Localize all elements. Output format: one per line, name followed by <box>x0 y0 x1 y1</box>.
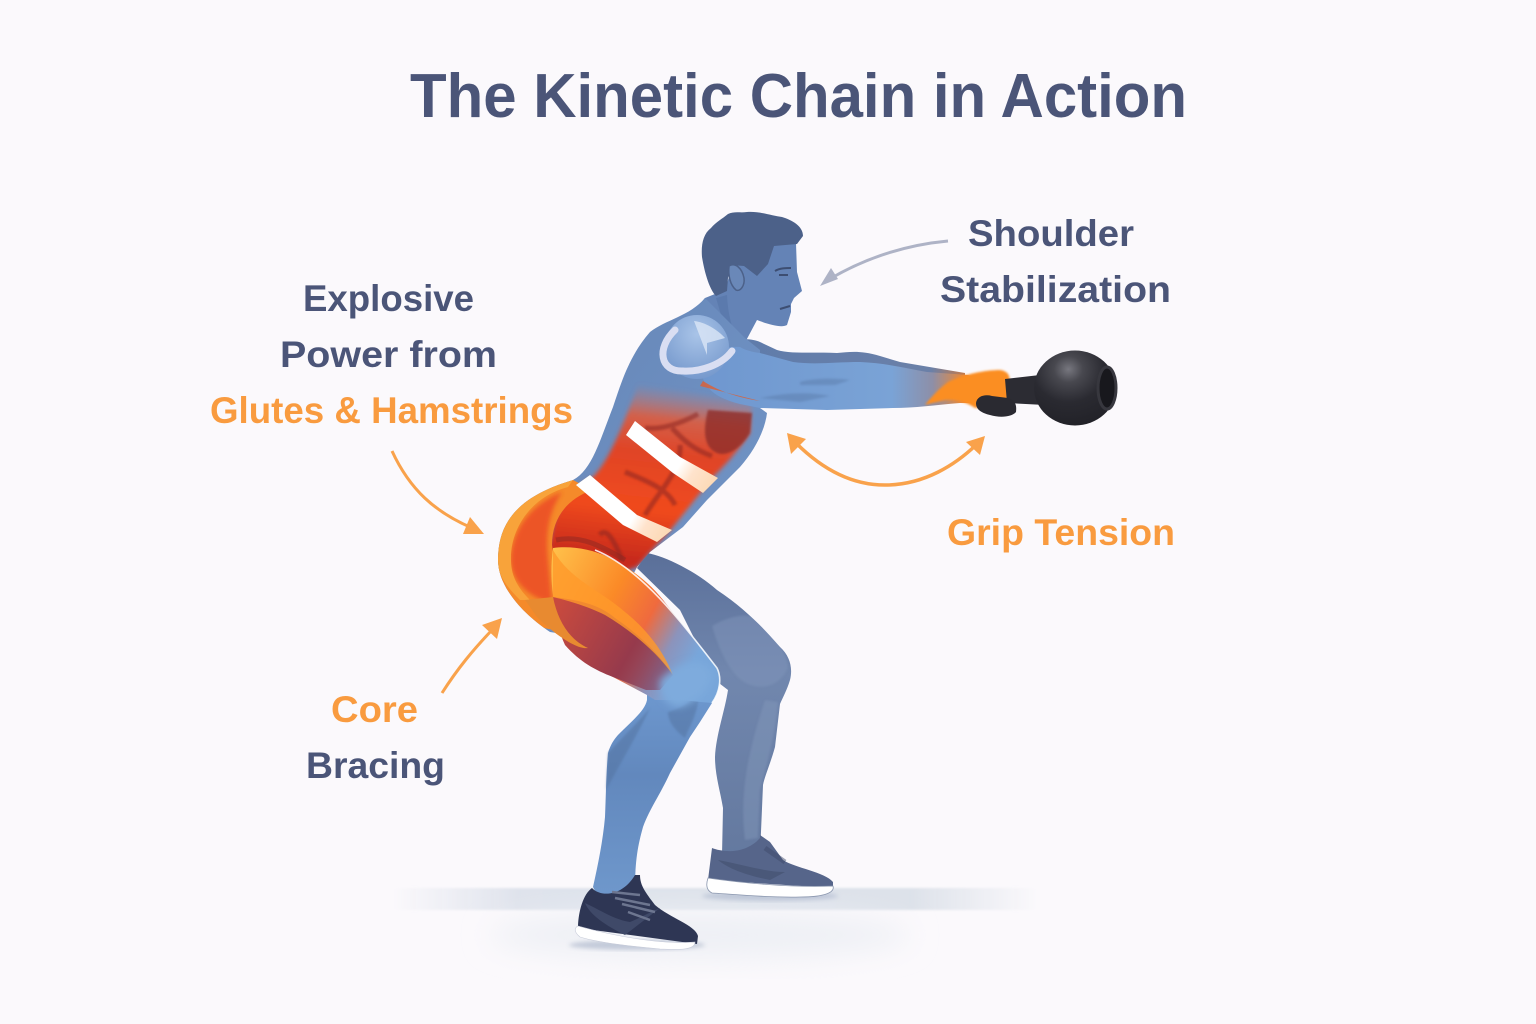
hair <box>702 212 803 296</box>
front arm <box>702 347 990 410</box>
front shoe <box>575 875 698 949</box>
label: explosive power: Glutes & Hamstrings <box>210 390 573 431</box>
label: core bracing: Bracing <box>306 745 445 786</box>
arrow: shoulder <box>820 241 948 286</box>
kettlebell <box>1005 350 1116 426</box>
label: explosive power: Explosive <box>303 278 474 319</box>
front thigh highlight line <box>595 550 720 703</box>
glute <box>498 480 586 630</box>
label: core bracing <box>306 689 445 786</box>
abdomen: red muscle area <box>545 380 752 580</box>
ear <box>729 265 744 290</box>
face details <box>775 268 791 309</box>
hand <box>925 370 1010 408</box>
floor shadow <box>390 888 1040 959</box>
arrow: glutes <box>392 451 484 534</box>
ab band lower <box>576 475 672 542</box>
label: explosive power <box>210 278 573 431</box>
hamstring shadow <box>553 597 673 690</box>
label: core bracing: Core <box>331 689 418 730</box>
arrow: grip double-headed <box>787 433 985 485</box>
label: shoulder stabilization: Shoulder <box>968 213 1134 254</box>
front shin <box>593 650 720 900</box>
glute underside <box>525 597 588 648</box>
label: explosive power: Power from <box>280 334 497 375</box>
underarm glow <box>700 381 760 401</box>
torso <box>498 298 767 640</box>
gripping fingers <box>976 395 1016 417</box>
label: grip tension: Grip Tension <box>947 512 1175 553</box>
far leg <box>637 553 791 855</box>
orange streak <box>553 550 673 675</box>
neck and head <box>665 212 803 352</box>
label: shoulder stabilization <box>940 213 1171 310</box>
front thigh <box>551 547 720 703</box>
rear shoe <box>707 835 833 897</box>
arm muscle shading <box>760 379 850 402</box>
knee light <box>660 662 712 707</box>
far knee muscle shading <box>712 615 788 840</box>
ab band upper <box>626 421 718 493</box>
far arm <box>740 339 965 385</box>
figure: kettlebell athlete <box>498 212 1116 949</box>
shoulder ring highlight <box>663 315 732 379</box>
label: shoulder stabilization: Stabilization <box>940 269 1171 310</box>
shin muscle shading <box>606 688 700 790</box>
arrow: core <box>442 618 502 693</box>
title: The Kinetic Chain in Action <box>410 62 1187 131</box>
